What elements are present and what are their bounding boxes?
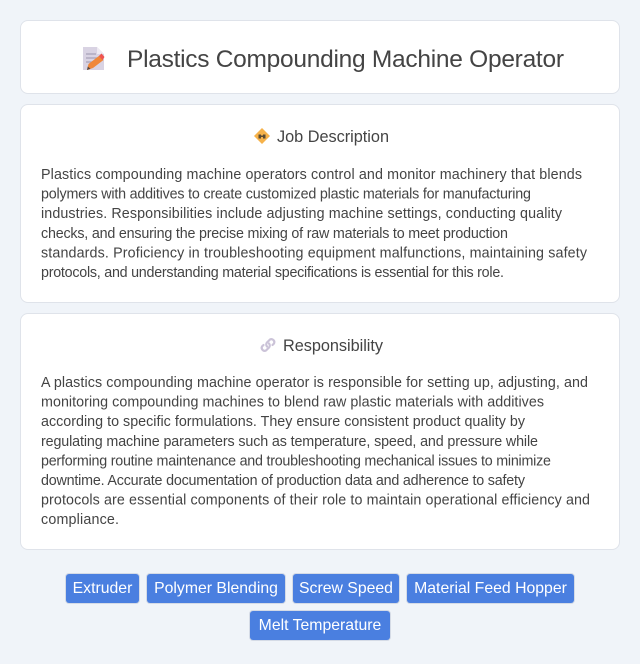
text: responsibility body: performing routine maintenance and troubleshooting mechanical issues to minimize bbox=[41, 453, 551, 469]
text: job description body bbox=[41, 167, 588, 281]
text: responsibility body: according to specific formulations. They ensure consistent product quality by bbox=[41, 414, 526, 430]
tag: Material Feed Hopper: Material Feed Hopper bbox=[414, 580, 567, 597]
text: job description body: protocols, and understanding material specifications is essential for this role. bbox=[41, 265, 504, 281]
text: job description body: polymers with additives to create customized plastic materials for manufacturing bbox=[41, 187, 531, 203]
text: responsibility body: compliance. bbox=[41, 512, 119, 528]
heading: responsibility: Responsibility bbox=[283, 337, 384, 355]
icon: document with pencil bbox=[83, 47, 104, 70]
tag: Melt Temperature bbox=[250, 611, 390, 640]
text: responsibility body: monitoring compounding machines to blend raw plastic materials with additives bbox=[41, 395, 544, 411]
tag: Screw Speed: Screw Speed bbox=[299, 580, 393, 597]
panel: job description bbox=[20, 104, 620, 303]
tag: Polymer Blending: Polymer Blending bbox=[154, 580, 278, 597]
tag: Polymer Blending bbox=[147, 574, 285, 603]
tag: Screw Speed bbox=[293, 574, 399, 603]
panel: responsibility bbox=[20, 313, 620, 550]
tag: Material Feed Hopper bbox=[407, 574, 574, 603]
panel: title bbox=[20, 20, 620, 94]
text: responsibility body: downtime. Accurate documentation of production data and adherence to safety bbox=[41, 473, 526, 489]
text: job description body: Plastics compounding machine operators control and monitor machinery that blends bbox=[41, 167, 582, 183]
tag: Melt Temperature: Melt Temperature bbox=[259, 617, 381, 634]
icon: chain link bbox=[260, 338, 276, 352]
title: Plastics Compounding Machine Operator bbox=[127, 46, 564, 73]
text: job description body: standards. Proficiency in troubleshooting equipment malfunctions, maintaining safety bbox=[41, 245, 588, 261]
heading: job description: Job Description bbox=[277, 128, 389, 146]
text: responsibility body: protocols are essential components of their role to maintain operational efficiency and bbox=[41, 493, 590, 509]
tag: Extruder bbox=[66, 574, 139, 603]
text: responsibility body: A plastics compounding machine operator is responsible for setting up, adjusting, and bbox=[41, 375, 588, 391]
text: job description body: industries. Responsibilities include adjusting machine settings, conducting quality bbox=[41, 206, 563, 222]
icon: orange diamond bbox=[254, 128, 270, 144]
text: job description body: checks, and ensuring the precise mixing of raw materials to meet production bbox=[41, 226, 508, 242]
text: responsibility body: regulating machine parameters such as temperature, speed, and pressure while bbox=[41, 434, 538, 450]
tag: Extruder: Extruder bbox=[73, 580, 132, 597]
text: responsibility body bbox=[41, 375, 590, 528]
